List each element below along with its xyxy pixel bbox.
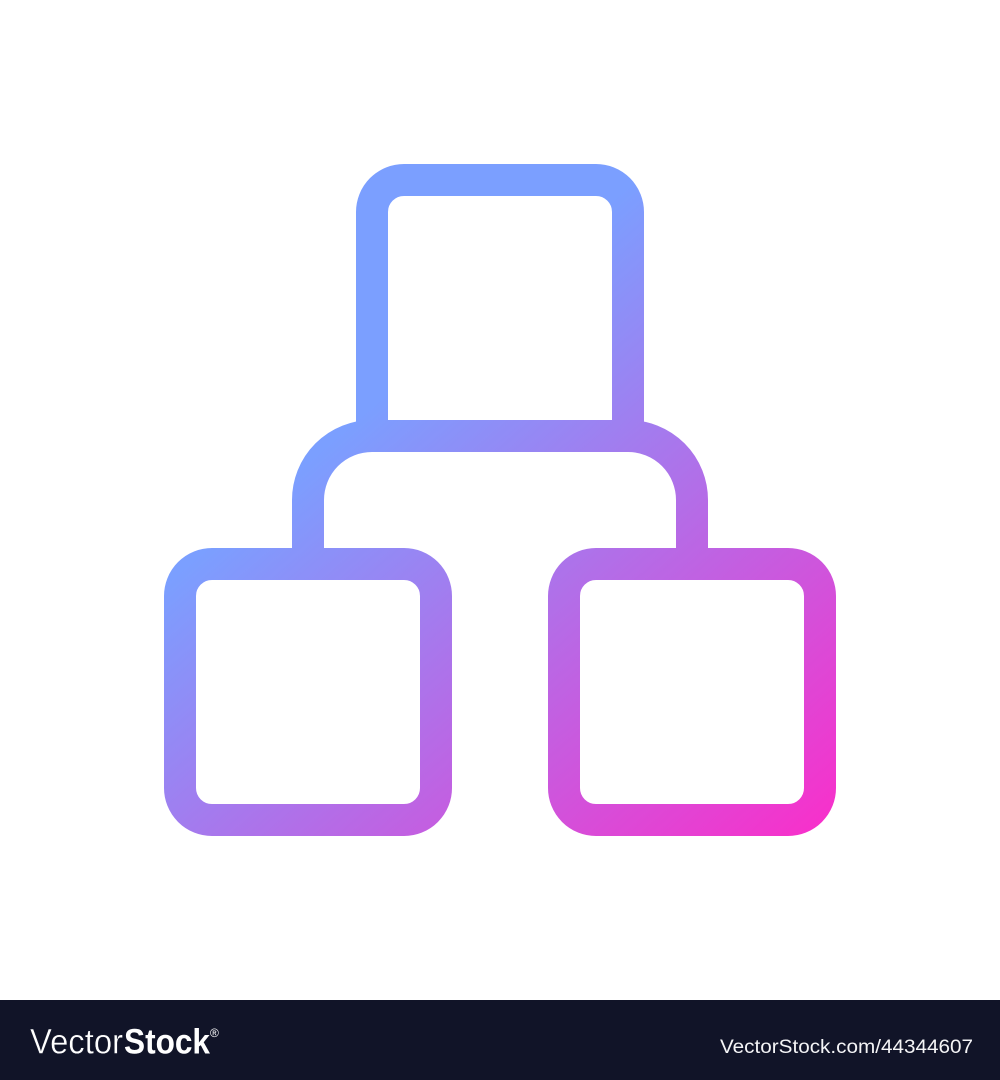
watermark logo text: Vector — [30, 1022, 123, 1062]
icon: top box — [372, 180, 628, 436]
registered mark: ® — [210, 1026, 219, 1040]
icon: bottom right box — [564, 564, 820, 820]
watermark logo text: Stock — [124, 1022, 210, 1062]
icon: connector arc — [308, 436, 692, 564]
watermark bar — [0, 1000, 1000, 1080]
icon: hierarchy diagram — [180, 180, 820, 820]
icon: bottom left box — [180, 564, 436, 820]
watermark logo text — [30, 1022, 210, 1062]
watermark url: VectorStock.com/44344607 — [720, 1037, 973, 1058]
